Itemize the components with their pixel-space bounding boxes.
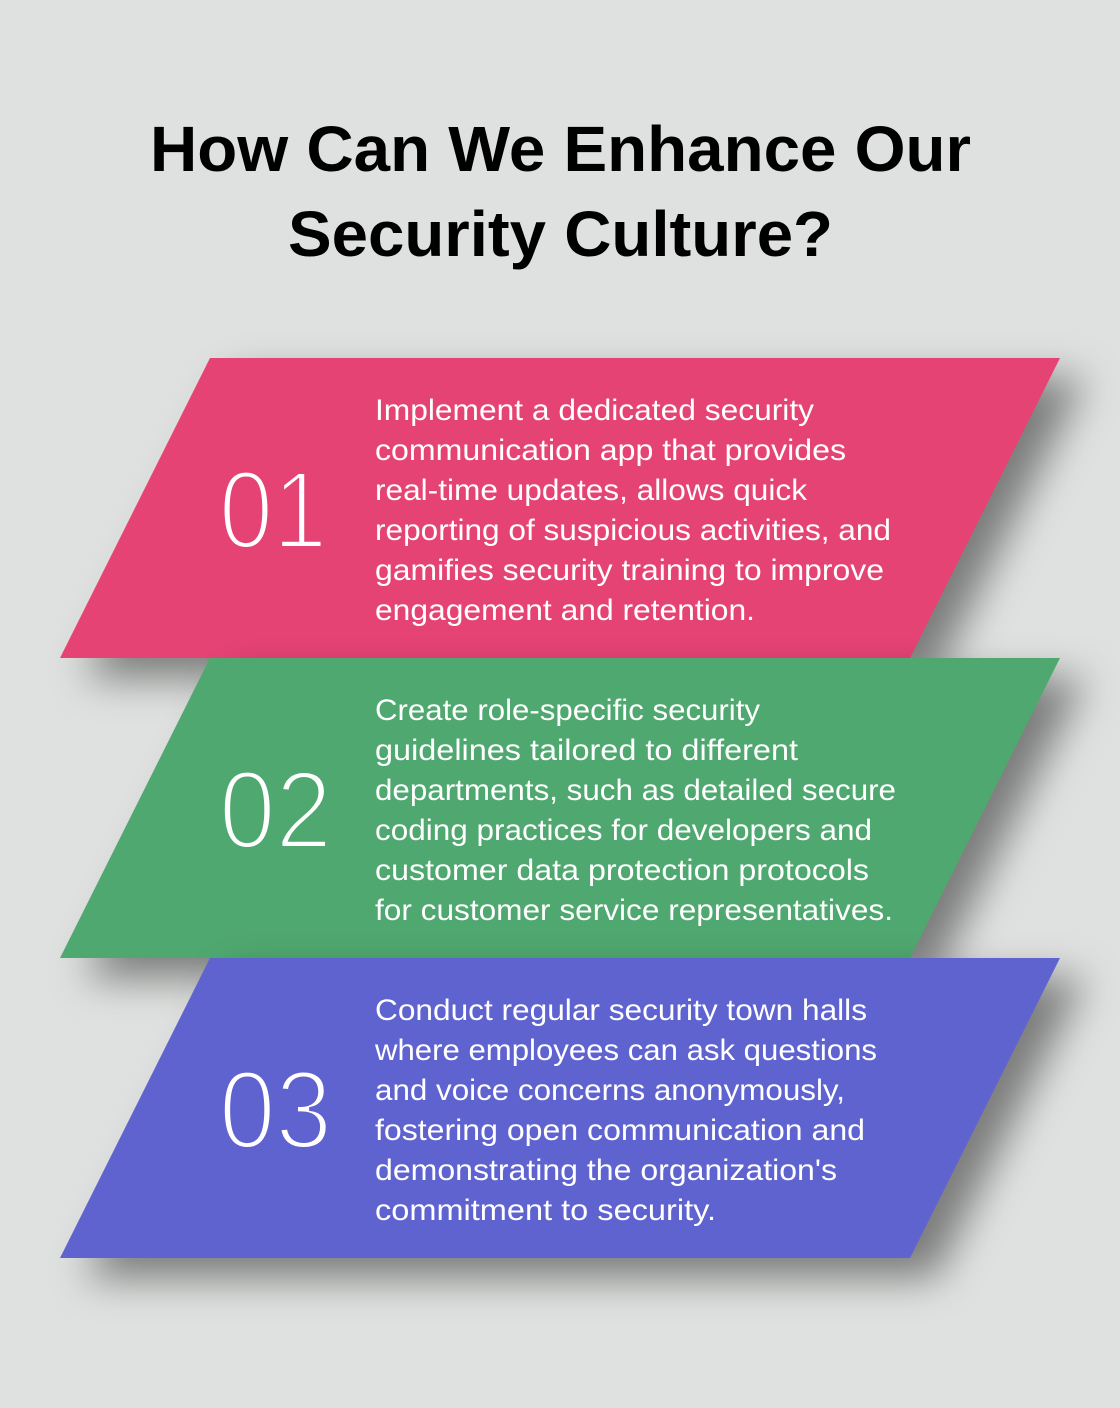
text block: step 02: Create role-specific security [375,694,760,727]
panel: step 01 [60,358,1085,678]
panel: step 02 [60,658,1085,978]
text block: step 01: real-time updates, allows quick [375,474,808,507]
title: Security Culture? [288,198,833,270]
number 01: 01 [219,449,327,572]
text block: step 01: gamifies security training to improve [375,554,884,587]
text block: step 02: customer data protection protocols [375,854,869,887]
title [150,113,971,270]
text block: step 02 [375,694,896,927]
text block: step 02: coding practices for developers and [375,814,872,847]
title: How Can We Enhance Our [150,113,971,185]
text block: step 03: Conduct regular security town halls [375,994,867,1027]
text block: step 03: and voice concerns anonymously, [375,1074,845,1107]
text block: step 03 [374,994,877,1227]
text block: step 03: commitment to security. [375,1194,716,1227]
text block: step 02: departments, such as detailed secure [375,774,896,807]
text block: step 01: reporting of suspicious activities, and [375,514,891,547]
number 03: 03 [219,1049,332,1172]
text block: step 03: demonstrating the organization's [375,1154,837,1187]
text block: step 01: engagement and retention. [375,594,755,627]
text block: step 01: communication app that provides [375,434,846,467]
text block: step 02: guidelines tailored to different [375,734,799,767]
text block: step 01 [375,394,891,627]
panel: step 03 [60,958,1085,1278]
text block: step 02: for customer service representatives. [375,894,893,927]
text block: step 03: where employees can ask questions [374,1034,877,1067]
text block: step 03: fostering open communication and [375,1114,865,1147]
number 02: 02 [219,749,332,872]
text block: step 01: Implement a dedicated security [375,394,814,427]
